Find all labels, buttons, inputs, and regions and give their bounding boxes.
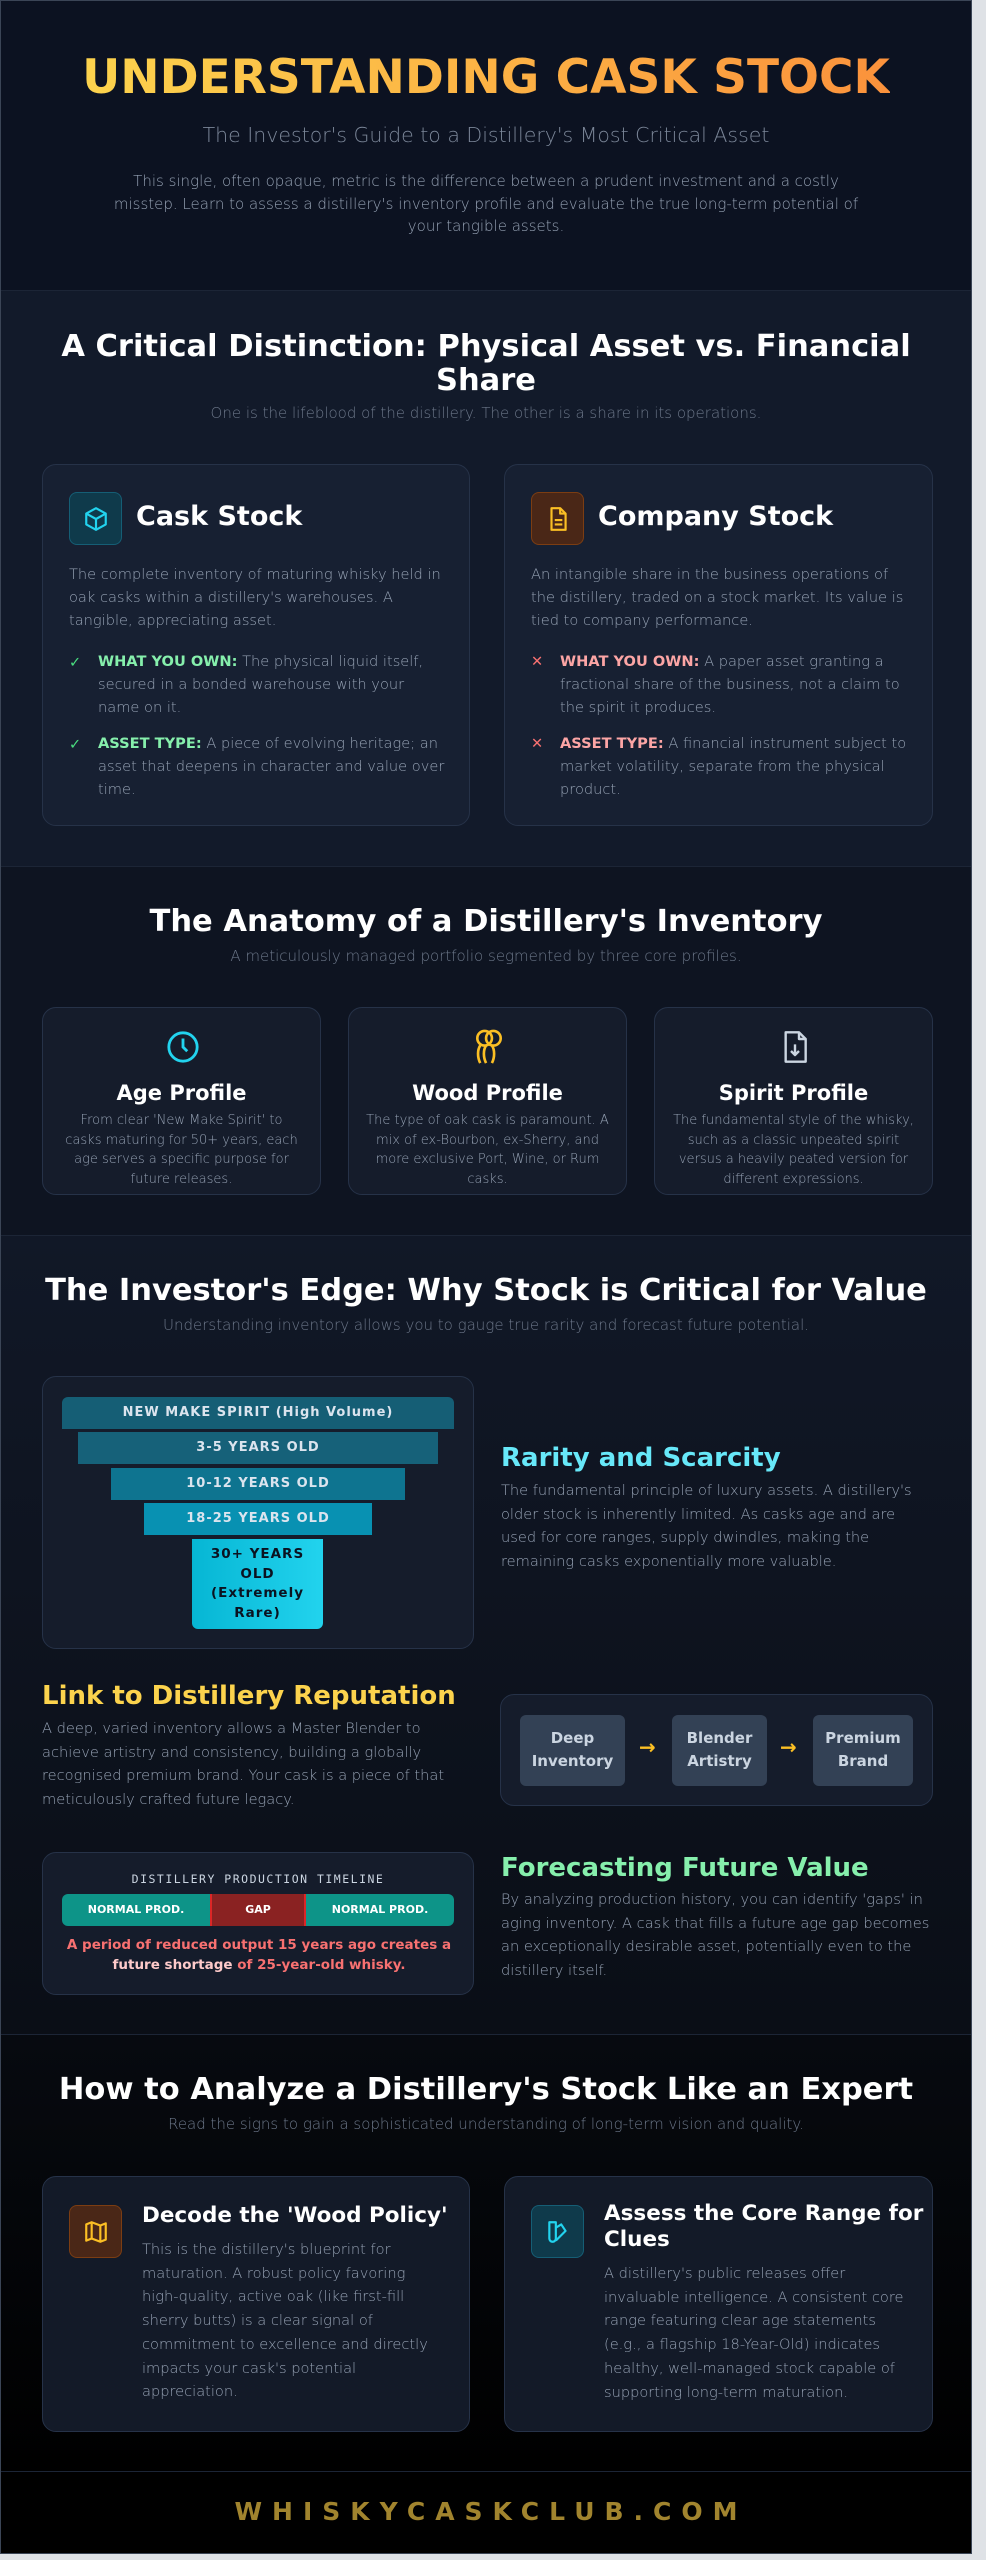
title: UNDERSTANDING CASK STOCK — [82, 50, 890, 105]
box: blender artistry: Blender Artistry — [687, 1729, 752, 1770]
timeline bar: NORMAL PROD. — [88, 1903, 184, 1916]
section: header — [1, 1, 971, 291]
icon: swatch — [531, 2205, 584, 2258]
section: anatomy — [1, 867, 971, 1236]
footer brand: WHISKYCASKCLUB.COM — [234, 2497, 748, 2526]
heading — [61, 329, 911, 398]
chart: production timeline — [42, 1852, 474, 1995]
box: deep inventory — [520, 1715, 625, 1786]
bar: 30+ — [192, 1539, 323, 1629]
subheading: One is the lifeblood of the distillery. The other is a share in its operations. — [211, 404, 761, 422]
heading: A Critical Distinction: Physical Asset vs. Financial — [61, 329, 911, 364]
paragraph: By analyzing production history, you can identify 'gaps' in aging inventory. A cask that fills a future age gap becomes an exceptionally desirable asset, potentially even to the distillery itself. — [501, 1891, 929, 1979]
bar: 10-12 — [111, 1468, 405, 1500]
subheading: A meticulously managed portfolio segmented by three core profiles. — [230, 947, 742, 965]
card title: Cask Stock — [136, 501, 302, 532]
text: forecasting — [501, 1853, 929, 1979]
section: how to analyze — [1, 2035, 971, 2472]
icon: document — [531, 492, 584, 545]
description: From clear 'New Make Spirit' to casks maturing for 50+ years, each age serves a specific purpose for future releases. — [65, 1113, 298, 1186]
flow diagram — [500, 1694, 933, 1806]
description: The type of oak cask is paramount. A mix of ex-Bourbon, ex-Sherry, and more exclusive Port, Wine, or Rum casks. — [366, 1113, 609, 1186]
heading: reputation: Link to Distillery Reputation — [42, 1681, 456, 1711]
item: what you own: WHAT YOU OWN: The physical liquid itself, secured in a bonded warehouse with your name on it. — [98, 653, 423, 716]
box: deep inventory: Deep Inventory — [532, 1729, 613, 1770]
heading: rarity: Rarity and Scarcity — [501, 1443, 781, 1473]
intro text: This single, often opaque, metric is the difference between a prudent investment and a costly misstep. Learn to assess a distillery's inventory profile and evaluate the true long-term potential of your tangible assets. — [114, 172, 858, 235]
panel: age profile — [42, 1007, 321, 1195]
box: blender artistry — [672, 1715, 767, 1786]
icon: file download — [784, 1031, 807, 1063]
timeline bar: GAP — [245, 1903, 271, 1916]
description: This is the distillery's blueprint for maturation. A robust policy favoring high-quality, active oak (like first-fill sherry butts) is a clear signal of commitment to excellence and directly impacts your cask's potential appreciation. — [142, 2241, 428, 2400]
section: physical vs financial — [1, 291, 971, 867]
panel: cask stock — [42, 464, 470, 826]
bar: 18-25: 18-25 YEARS OLD — [186, 1511, 330, 1526]
box: premium brand: Premium Brand — [825, 1729, 901, 1770]
timeline bar: NORMAL PROD. — [332, 1903, 428, 1916]
subtitle: The Investor's Guide to a Distillery's Most Critical Asset — [203, 123, 769, 147]
panel: wood profile — [348, 1007, 627, 1195]
panel: company stock: ✕ — [531, 653, 543, 670]
panel: cask stock: ✓ — [69, 736, 81, 753]
text: reputation — [42, 1681, 456, 1808]
subheading: Read the signs to gain a sophisticated understanding of long-term vision and quality. — [168, 2115, 804, 2133]
arrow: → — [780, 1735, 797, 1759]
card title: Wood Profile — [412, 1081, 563, 1105]
box: premium brand — [813, 1715, 913, 1786]
bar: 30+: 30+ YEARS OLD (Extremely Rare) — [211, 1546, 304, 1620]
description: The complete inventory of maturing whisky held in oak casks within a distillery's warehouses. A tangible, appreciating asset. — [69, 566, 441, 629]
panel: cask stock: ✓ — [69, 654, 81, 671]
timeline bar — [62, 1894, 454, 1926]
bar: 3-5: 3-5 YEARS OLD — [196, 1440, 320, 1455]
chart: age funnel — [42, 1376, 474, 1649]
icon: map — [69, 2205, 122, 2258]
timeline title: DISTILLERY PRODUCTION TIMELINE — [132, 1872, 384, 1886]
description: The fundamental style of the whisky, such as a classic unpeated spirit versus a heavily peated version for different expressions. — [673, 1113, 914, 1186]
description: An intangible share in the business operations of the distillery, traded on a stock market. Its value is tied to company performance. — [531, 566, 903, 629]
icon: clock — [167, 1031, 199, 1063]
card title: Decode the 'Wood Policy' — [142, 2203, 448, 2228]
heading: forecasting: Forecasting Future Value — [501, 1853, 869, 1883]
section: investor's edge — [1, 1236, 971, 2035]
item: asset type: ASSET TYPE: A financial instrument subject to market volatility, separate from the physical product. — [560, 735, 906, 798]
subheading: Understanding inventory allows you to gauge true rarity and forecast future potential. — [163, 1316, 809, 1334]
paragraph: The fundamental principle of luxury assets. A distillery's older stock is inherently limited. As casks age and are used for core ranges, supply dwindles, making the remaining casks exponentially more valuable. — [501, 1482, 912, 1570]
panel: wood policy — [42, 2176, 470, 2432]
description: A distillery's public releases offer invaluable intelligence. A consistent core range featuring clear age statements (e.g., a flagship 18-Year-Old) indicates healthy, well-managed stock capable of supporting long-term maturation. — [604, 2265, 904, 2401]
bar: 10-12: 10-12 YEARS OLD — [186, 1476, 330, 1491]
item: asset type: ASSET TYPE: A piece of evolving heritage; an asset that deepens in character and value over time. — [98, 735, 444, 798]
text: rarity — [501, 1443, 912, 1570]
heading: The Investor's Edge: Why Stock is Critical for Value — [45, 1273, 927, 1308]
bar: new make — [62, 1397, 454, 1429]
icon: cube — [69, 492, 122, 545]
panel: core range — [504, 2176, 933, 2432]
footer — [1, 2472, 971, 2555]
paragraph: A deep, varied inventory allows a Master Blender to achieve artistry and consistency, building a globally recognised premium brand. Your cask is a piece of that meticulously crafted future legacy. — [42, 1720, 444, 1808]
bar: 18-25 — [144, 1503, 372, 1535]
card title: Assess the Core Range for Clues — [604, 2201, 923, 2252]
bar: 3-5 — [78, 1432, 438, 1464]
heading: The Anatomy of a Distillery's Inventory — [150, 904, 822, 939]
icon: coins — [476, 1030, 502, 1064]
panel: spirit profile — [654, 1007, 933, 1195]
heading: Share — [436, 363, 536, 398]
bar: new make: NEW MAKE SPIRIT (High Volume) — [123, 1405, 393, 1420]
item: what you own: WHAT YOU OWN: A paper asset granting a fractional share of the business, not a claim to the spirit it produces. — [560, 653, 900, 716]
heading: How to Analyze a Distillery's Stock Like an Expert — [59, 2072, 913, 2107]
card title: Age Profile — [116, 1081, 247, 1105]
arrow: → — [639, 1735, 656, 1759]
note: A period of reduced output 15 years ago creates a future shortage of 25-year-old whisky. — [67, 1937, 451, 1972]
panel: company stock — [504, 464, 933, 826]
card title: Company Stock — [598, 501, 833, 532]
panel: company stock: ✕ — [531, 735, 543, 752]
card title: Spirit Profile — [719, 1081, 868, 1105]
